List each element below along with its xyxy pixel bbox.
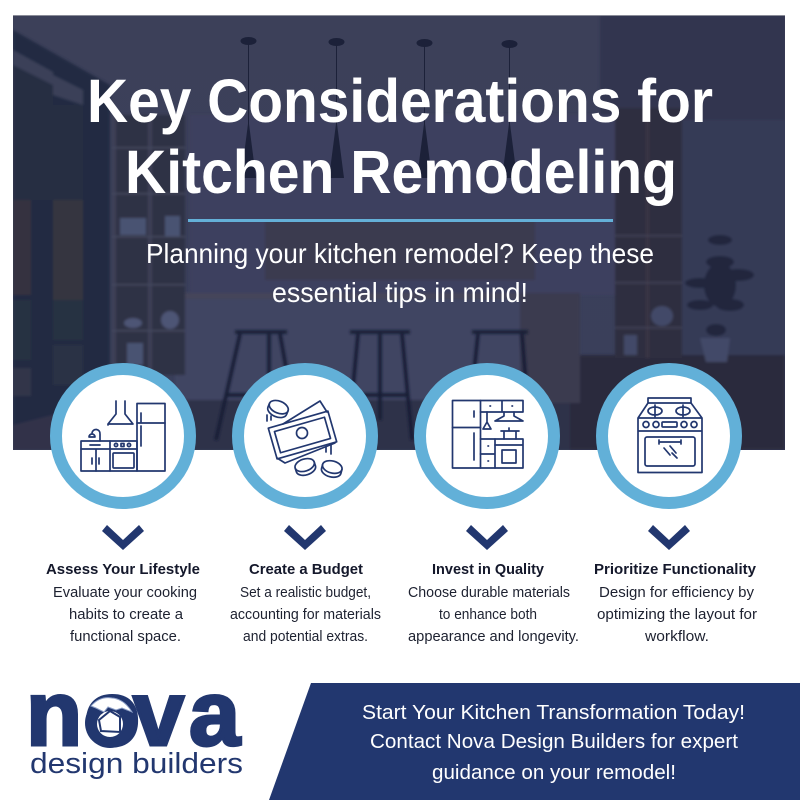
logo: nova design builders <box>26 663 243 780</box>
step 1: assess your lifestyle <box>46 369 200 645</box>
window wall <box>13 30 110 425</box>
text: prioritize functionality: workflow. <box>644 628 709 645</box>
text: invest in quality: appearance and longevity. <box>408 628 579 645</box>
right shelf <box>615 108 682 358</box>
text: invest in quality <box>408 561 579 645</box>
banner text <box>362 701 745 784</box>
plant <box>685 235 754 336</box>
logo wordmark: nova <box>26 663 241 765</box>
text: prioritize functionality <box>594 561 757 645</box>
text: assess your lifestyle: Evaluate your cooking <box>53 584 197 601</box>
text: assess your lifestyle: Assess Your Lifestyle <box>46 561 200 578</box>
back cabinets and island <box>600 115 611 117</box>
title: Kitchen Remodeling <box>125 138 677 206</box>
banner shape <box>269 683 800 800</box>
subtitle: essential tips in mind! <box>272 277 528 308</box>
banner text: Contact Nova Design Builders for expert <box>370 730 738 753</box>
floor <box>13 385 190 450</box>
text: assess your lifestyle: functional space. <box>70 628 181 645</box>
title underline <box>188 219 613 222</box>
title: Key Considerations for <box>87 67 713 135</box>
text: create a budget: and potential extras. <box>243 628 368 645</box>
text: create a budget: Create a Budget <box>249 561 363 578</box>
left shelf <box>112 115 185 375</box>
title <box>87 67 713 206</box>
text: prioritize functionality: optimizing the layout for <box>597 606 757 623</box>
chevron 2 <box>284 525 326 550</box>
circle badge 3 <box>420 369 554 503</box>
icon: stove and oven <box>638 398 702 472</box>
step 2: create a budget <box>230 369 381 645</box>
text: create a budget <box>230 561 381 645</box>
text: invest in quality: Invest in Quality <box>432 561 545 578</box>
logo emblem: house and skyline <box>85 698 135 748</box>
icon: money and coins <box>266 398 343 479</box>
icon: fitted kitchen <box>452 400 523 468</box>
chevron 3 <box>466 525 508 550</box>
chevron 4 <box>648 525 690 550</box>
circle badge 2 <box>238 369 372 503</box>
step 4: prioritize functionality <box>594 369 757 645</box>
background photo: dark kitchen interior <box>13 15 785 450</box>
text: create a budget: Set a realistic budget, <box>240 584 371 601</box>
text: create a budget: accounting for materials <box>230 606 381 623</box>
text: invest in quality: to enhance both <box>439 606 537 623</box>
stools <box>216 332 528 440</box>
step 3: invest in quality <box>408 369 579 645</box>
ceiling and right wall <box>600 15 785 120</box>
subtitle <box>146 238 654 308</box>
logo tagline: design builders <box>30 748 243 780</box>
banner text: Start Your Kitchen Transformation Today! <box>362 701 745 724</box>
icon: kitchen with fridge and hood <box>81 401 165 471</box>
banner text: guidance on your remodel! <box>432 761 676 784</box>
text: prioritize functionality: Design for efficiency by <box>599 584 754 601</box>
call-to-action banner <box>269 683 800 800</box>
text: assess your lifestyle: habits to create a <box>69 606 184 623</box>
text: invest in quality: Choose durable materials <box>408 584 570 601</box>
circle badge 1 <box>56 369 190 503</box>
text: prioritize functionality: Prioritize Functionality <box>594 561 757 578</box>
text: assess your lifestyle <box>46 561 200 645</box>
pendant lamps <box>240 37 518 178</box>
subtitle: Planning your kitchen remodel? Keep these <box>146 238 654 269</box>
circle badge 4 <box>602 369 736 503</box>
chevron 1 <box>102 525 144 550</box>
